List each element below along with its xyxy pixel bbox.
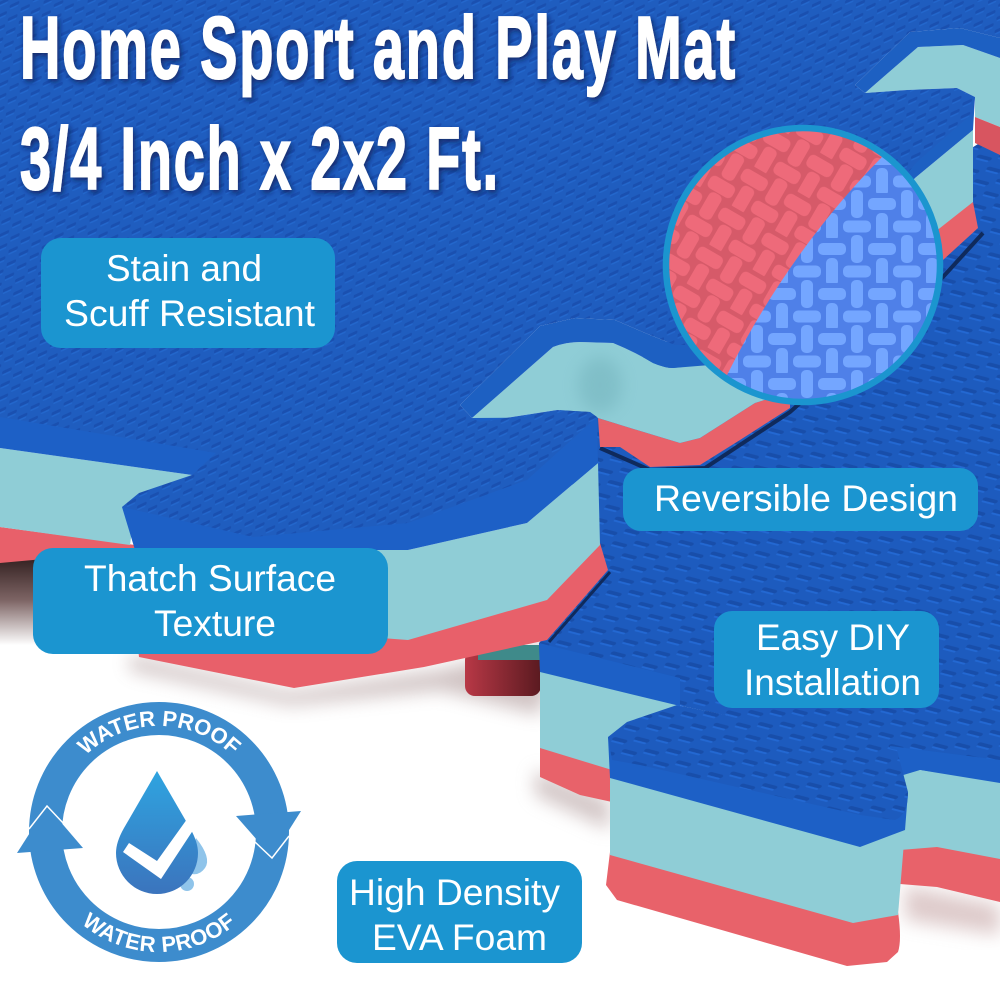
water proof badge: WATER PROOF <box>84 912 232 952</box>
pill: Stain and Scuff Resistant: Stain and <box>106 247 262 289</box>
left side band red <box>540 745 612 802</box>
right side band red <box>900 846 1000 902</box>
right arrow <box>236 811 301 858</box>
pill: Thatch Surface Texture: Thatch Surface <box>84 557 336 599</box>
far right red band <box>975 117 1000 155</box>
water proof badge <box>17 702 301 962</box>
pill: Reversible Design <box>623 468 978 531</box>
lower right mat <box>539 130 1000 966</box>
left side band aqua <box>540 670 680 770</box>
pill: Stain and Scuff Resistant <box>41 238 335 348</box>
cast shadows on white floor <box>0 555 1000 935</box>
pill: Thatch Surface Texture <box>33 548 388 654</box>
pill: Easy DIY Installation <box>714 611 939 708</box>
gap shadow <box>600 233 983 470</box>
left strip aqua <box>0 448 192 545</box>
water proof top text <box>53 726 265 832</box>
center tab and edge blue side <box>0 400 598 550</box>
upper tab blue side <box>840 97 975 240</box>
textured top surface <box>539 130 1000 783</box>
water drop <box>116 771 198 894</box>
center tab aqua layer <box>135 463 600 640</box>
pill: Easy DIY Installation: Easy DIY <box>756 616 910 658</box>
tab edge shadow <box>549 572 610 642</box>
left strip red <box>0 527 135 580</box>
left arrow <box>17 806 83 853</box>
right tab aqua band <box>880 130 973 260</box>
center notch red band <box>598 392 790 467</box>
tab red layer <box>606 852 900 966</box>
texture inset circle <box>662 124 944 406</box>
title line 2: 3/4 Inch x 2x2 Ft. <box>20 109 500 208</box>
check mark <box>123 801 209 879</box>
water proof badge: WATER PROOF <box>76 710 242 753</box>
inset ring <box>666 128 940 402</box>
tab textured top <box>608 705 908 820</box>
pill: Easy DIY Installation: Installation <box>744 661 921 703</box>
red side texture <box>669 131 882 375</box>
pill: High Density EVA Foam: High Density <box>349 871 560 913</box>
small droplets <box>180 838 207 891</box>
right side band blue <box>890 746 1000 785</box>
far right blue side band <box>855 28 1000 93</box>
far right aqua band <box>865 45 1000 127</box>
water proof bottom text <box>39 832 279 952</box>
blue back side texture <box>667 129 939 401</box>
recessed piece under the tab <box>465 645 541 696</box>
pill: High Density EVA Foam <box>337 861 582 963</box>
upper mat <box>0 0 1000 688</box>
notch blue side band <box>460 318 710 418</box>
pill: Stain and Scuff Resistant: Scuff Resistant <box>64 292 316 334</box>
upper mat textured top surface <box>0 0 1000 537</box>
right tab red band <box>920 202 978 270</box>
aqua fold shading <box>578 357 622 413</box>
center tab red layer <box>135 543 608 688</box>
pill: Reversible Design: Reversible Design <box>654 477 958 519</box>
tab aqua layer <box>610 772 905 923</box>
title <box>20 0 737 208</box>
pill: Thatch Surface Texture: Texture <box>154 602 276 644</box>
circular ring <box>46 718 272 946</box>
front tab <box>606 705 908 966</box>
tab blue side <box>608 737 908 847</box>
center notch aqua band <box>472 342 790 443</box>
right side band aqua <box>900 770 1000 859</box>
left side band blue <box>539 643 680 706</box>
pill: High Density EVA Foam: EVA Foam <box>372 916 547 958</box>
